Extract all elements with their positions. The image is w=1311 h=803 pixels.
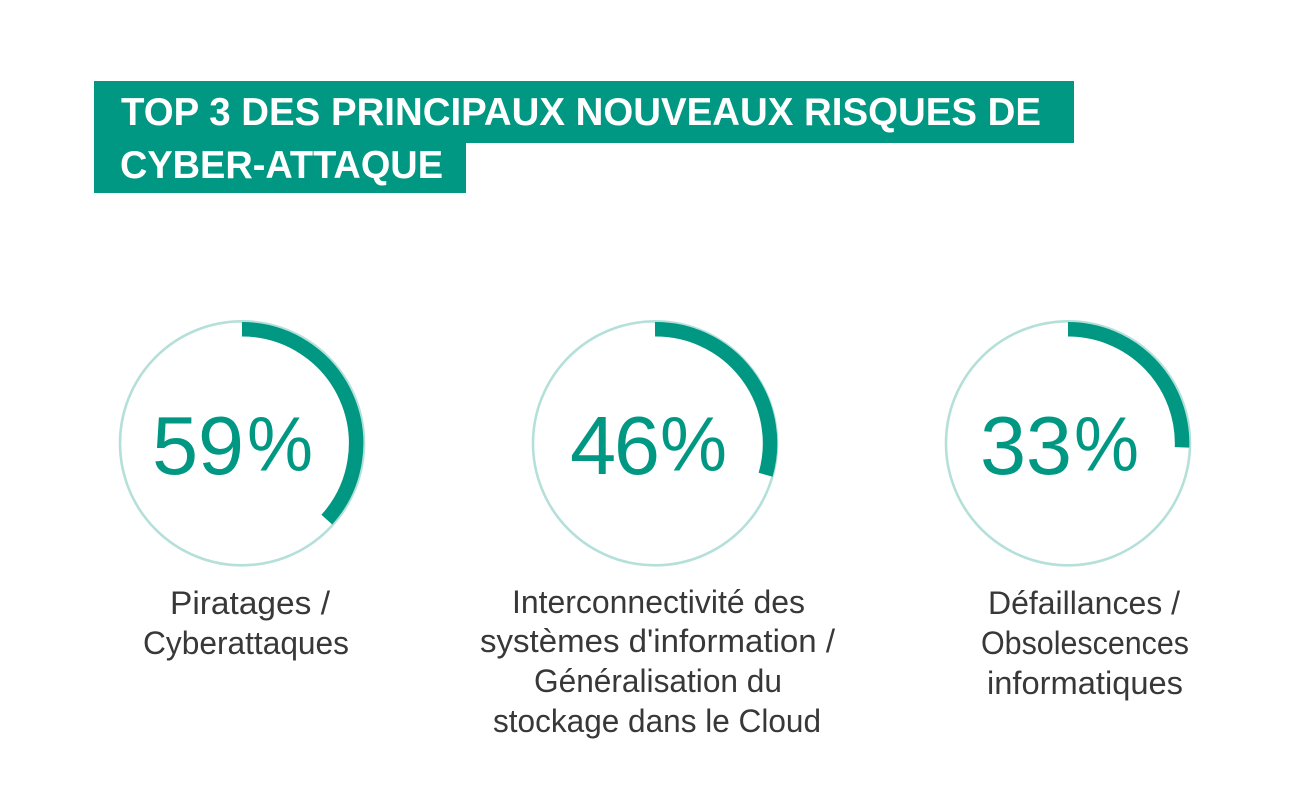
value: 59% — [152, 399, 313, 492]
gauge: 46% — [533, 321, 777, 565]
label: interconnectivité: Généralisation du — [534, 663, 782, 699]
label: défaillances: Défaillances / — [988, 585, 1180, 621]
panel: interconnectivité — [480, 321, 835, 739]
value: 59%: % — [247, 402, 313, 488]
title — [94, 81, 1074, 193]
label: défaillances: informatiques — [987, 665, 1183, 701]
value: 46%: 46 — [570, 399, 660, 492]
label: piratages: Piratages / — [170, 585, 330, 621]
label: défaillances — [981, 585, 1189, 701]
title: TOP 3 DES PRINCIPAUX NOUVEAUX RISQUES DE — [121, 91, 1041, 134]
value: 33%: % — [1074, 402, 1139, 488]
gauge: 33% — [946, 321, 1190, 565]
label: piratages: Cyberattaques — [143, 625, 349, 661]
value: 33%: 33 — [980, 399, 1072, 492]
value: 59%: 59 — [152, 399, 244, 492]
value: 46% — [570, 399, 727, 492]
panel: piratages — [120, 321, 364, 661]
label: défaillances: Obsolescences — [981, 625, 1189, 661]
label: interconnectivité: systèmes d'information / — [480, 623, 835, 659]
gauge: 59% — [120, 321, 364, 565]
title: CYBER-ATTAQUE — [120, 144, 443, 187]
label: piratages — [143, 585, 349, 661]
label: interconnectivité: Interconnectivité des — [512, 584, 805, 620]
value: 33% — [980, 399, 1139, 492]
value: 46%: % — [660, 402, 727, 488]
label: interconnectivité: stockage dans le Cloud — [493, 703, 821, 739]
label: interconnectivité — [480, 584, 835, 739]
panel: défaillances — [946, 321, 1190, 701]
